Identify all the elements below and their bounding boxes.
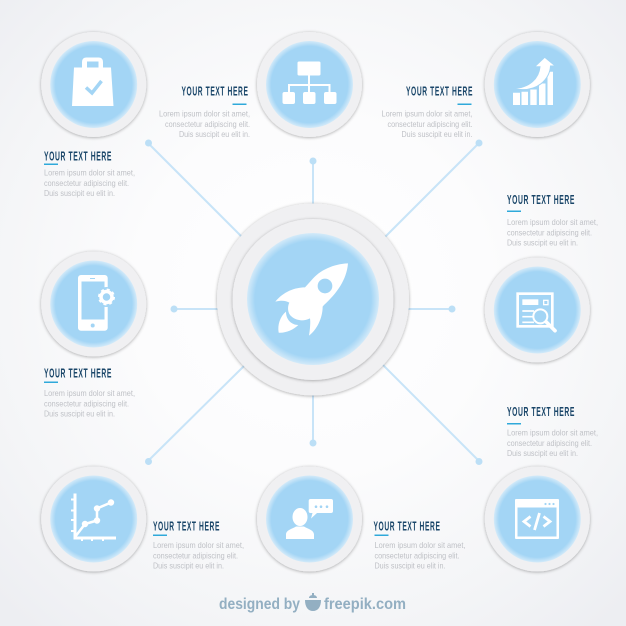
text block: bottom centre bbox=[374, 520, 466, 570]
text block: bottom centre: consectetur adipiscing elit. bbox=[374, 551, 460, 560]
badge: shopping bag bbox=[41, 32, 146, 137]
badge: line chart bbox=[41, 466, 146, 572]
icon: person with speech bubble bbox=[286, 499, 333, 539]
text block: right lower bbox=[507, 405, 598, 458]
text block: right upper bbox=[507, 193, 598, 248]
badge: code window bbox=[485, 466, 590, 572]
text block: bottom left bbox=[153, 520, 244, 570]
text block: bottom left: Lorem ipsum dolor sit amet, bbox=[153, 541, 244, 550]
badge: growth chart bbox=[485, 32, 590, 137]
text block: right upper: Lorem ipsum dolor sit amet, bbox=[507, 218, 598, 227]
icon: rising bars and arrow bbox=[513, 57, 555, 105]
text block: right lower: Lorem ipsum dolor sit amet, bbox=[507, 428, 598, 438]
text block: bottom left: YOUR TEXT HERE bbox=[153, 520, 220, 534]
text block: left middle bbox=[44, 366, 135, 418]
text block: right lower: consectetur adipiscing elit. bbox=[507, 439, 592, 448]
text block: top right: YOUR TEXT HERE bbox=[406, 85, 473, 99]
text block: top right: Duis suscipit eu elit in. bbox=[402, 130, 472, 139]
text block: top left: Lorem ipsum dolor sit amet, bbox=[44, 169, 135, 178]
text block: top right: Lorem ipsum dolor sit amet, bbox=[382, 110, 472, 119]
text block: top right bbox=[382, 85, 473, 139]
footer credit: designed by bbox=[219, 596, 300, 613]
text block: left middle: YOUR TEXT HERE bbox=[44, 366, 112, 380]
icon: browser code bbox=[515, 499, 559, 539]
icon: bag with check bbox=[72, 58, 114, 106]
badge: mobile settings bbox=[41, 252, 146, 356]
text block: top centre: YOUR TEXT HERE bbox=[182, 85, 248, 99]
icon: org chart bbox=[282, 62, 336, 104]
badge: hierarchy bbox=[257, 32, 362, 137]
icon: freepik logo bbox=[305, 593, 321, 611]
text block: right upper: Duis suscipit eu elit in. bbox=[507, 238, 578, 248]
text block: top centre bbox=[159, 85, 250, 139]
badge: user chat bbox=[257, 466, 362, 572]
text block: left middle: consectetur adipiscing elit. bbox=[44, 399, 129, 408]
text block: left middle: Lorem ipsum dolor sit amet, bbox=[44, 389, 135, 398]
text block: right lower: Duis suscipit eu elit in. bbox=[507, 449, 578, 458]
text block: top left bbox=[44, 150, 135, 198]
icon: page with magnifier bbox=[518, 294, 555, 331]
icon: phone with gear bbox=[78, 275, 116, 331]
badge: web search bbox=[485, 258, 590, 362]
text block: top centre: consectetur adipiscing elit. bbox=[165, 120, 250, 129]
text block: top centre: Duis suscipit eu elit in. bbox=[179, 130, 250, 139]
text block: top right: consectetur adipiscing elit. bbox=[388, 120, 472, 129]
footer credit bbox=[219, 593, 406, 613]
text block: bottom centre: Lorem ipsum dolor sit amet, bbox=[374, 541, 466, 550]
text block: right upper: consectetur adipiscing elit. bbox=[507, 228, 592, 237]
text block: top centre: Lorem ipsum dolor sit amet, bbox=[159, 110, 250, 119]
text block: bottom centre: Duis suscipit eu elit in. bbox=[374, 562, 446, 570]
central rocket badge bbox=[217, 204, 409, 396]
footer credit: freepik.com bbox=[324, 596, 406, 613]
icon: line graph bbox=[71, 494, 116, 541]
text block: top left: YOUR TEXT HERE bbox=[44, 150, 112, 164]
icon: rocket bbox=[275, 263, 348, 336]
text block: bottom left: Duis suscipit eu elit in. bbox=[153, 562, 224, 570]
text block: top left: Duis suscipit eu elit in. bbox=[44, 189, 115, 198]
connector lines bbox=[145, 140, 482, 465]
text block: bottom centre: YOUR TEXT HERE bbox=[374, 520, 440, 534]
text block: bottom left: consectetur adipiscing elit. bbox=[153, 551, 238, 560]
text block: top left: consectetur adipiscing elit. bbox=[44, 179, 129, 188]
text block: left middle: Duis suscipit eu elit in. bbox=[44, 410, 115, 418]
